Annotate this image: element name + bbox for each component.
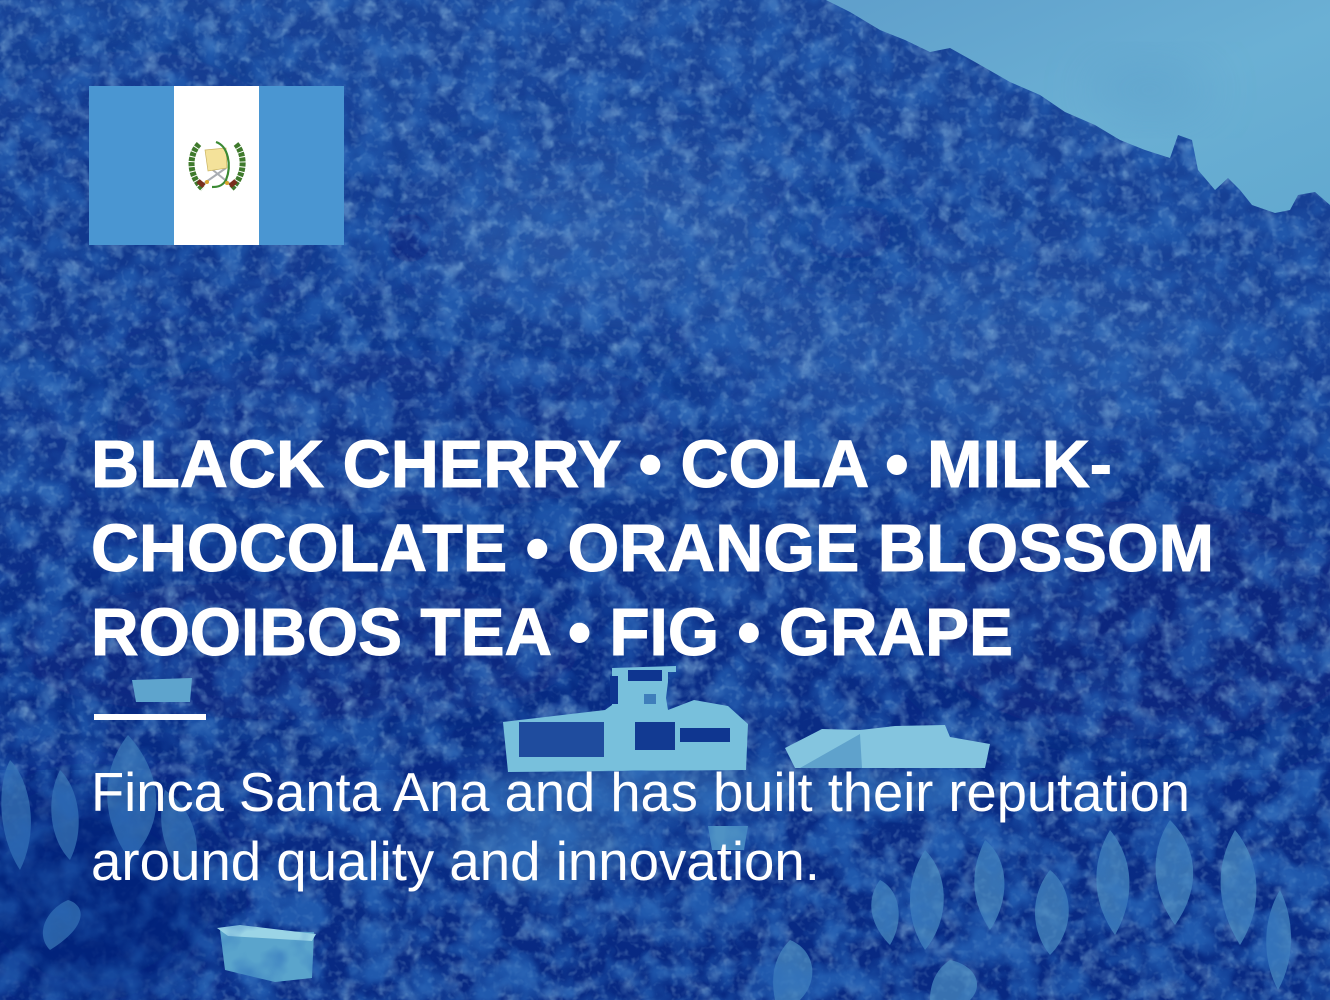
- sky: [826, 0, 1330, 213]
- beehive box structure: [220, 930, 314, 982]
- description text: around quality and innovation.: [91, 830, 820, 892]
- tonal light and dark regions of the forest: [0, 50, 1330, 740]
- heading: flavour notes: BLACK CHERRY • COLA • MILK-: [91, 427, 1112, 502]
- banana leaves left: [1, 735, 197, 950]
- heading: flavour notes: CHOCOLATE • ORANGE BLOSSOM: [91, 511, 1214, 586]
- flag right stripe: [259, 86, 344, 245]
- divider rule: [94, 714, 206, 720]
- flag left stripe: [89, 86, 174, 245]
- dark foreground shadow: [0, 790, 220, 1000]
- description text: [91, 761, 1190, 892]
- foreground foliage shadow texture: [0, 770, 1330, 1000]
- flag of Guatemala: [89, 86, 344, 245]
- heading: flavour notes: [91, 427, 1214, 670]
- small post box: [708, 826, 748, 850]
- coffee leaves right: [773, 820, 1291, 1000]
- heading: flavour notes: ROOIBOS TEA • FIG • GRAPE: [91, 595, 1013, 670]
- main building with tower: [503, 666, 748, 772]
- cloud tones: [1090, 68, 1210, 112]
- lit vegetation around the farm: [450, 764, 980, 890]
- small shed upper left: [132, 678, 192, 702]
- farm buildings: [132, 666, 990, 982]
- flag centre stripe: [174, 86, 259, 245]
- description text: Finca Santa Ana and has built their reputation: [91, 761, 1190, 823]
- greenhouses: [785, 725, 990, 768]
- icon: coat of arms: [192, 142, 243, 189]
